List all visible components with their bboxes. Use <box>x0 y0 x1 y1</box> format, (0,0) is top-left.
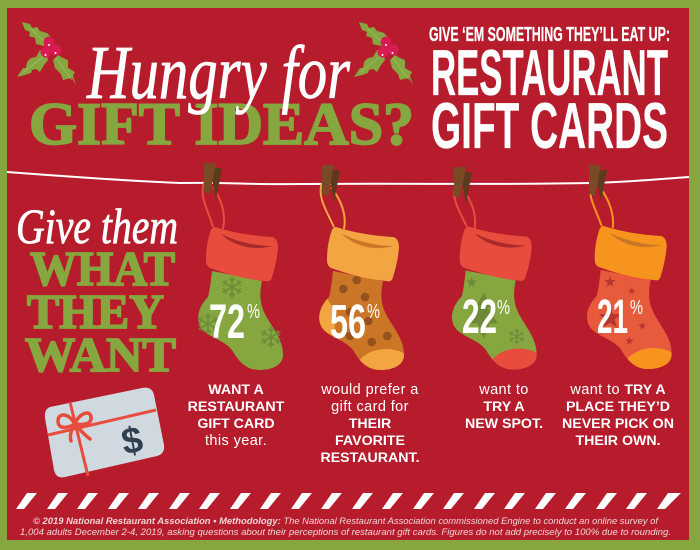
caption: 56%: gift card for <box>331 399 409 415</box>
caption: 72%: GIFT CARD <box>197 416 275 432</box>
caption: 56%: would prefer a <box>320 382 419 398</box>
heading: WANT: WANT <box>25 327 176 382</box>
caption: 56%: THEIR <box>349 416 391 432</box>
stocking: 22% <box>452 189 537 370</box>
caption: 21%: THEIR OWN. <box>575 433 661 449</box>
caption: 72% <box>188 382 285 449</box>
striped divider <box>16 493 681 509</box>
caption: 21%: PLACE THEY’D <box>566 399 670 415</box>
icon: holly left <box>17 22 76 85</box>
caption: 72%: RESTAURANT <box>188 399 285 415</box>
stat: 21%: 21 <box>597 291 628 344</box>
caption: 72%: WANT A <box>208 382 264 398</box>
caption: 56%: RESTAURANT. <box>320 450 420 466</box>
footer methodology: © 2019 National Restaurant Association • Methodology: The National Restaurant Association commissioned Engine to conduct an online survey of <box>33 516 659 527</box>
caption: 21% <box>562 382 674 449</box>
stat: 72%: 72 <box>209 296 245 349</box>
caption: 56%: FAVORITE <box>335 433 405 449</box>
footer methodology <box>20 516 671 538</box>
caption: 56% <box>320 382 420 466</box>
clothespins <box>204 163 607 204</box>
stocking: 72% <box>198 183 283 370</box>
stocking: 21% <box>586 190 672 369</box>
heading: WHAT: WHAT <box>30 241 175 296</box>
caption: 22%: NEW SPOT. <box>465 416 543 432</box>
stat: 22%: 22 <box>462 291 497 344</box>
clothesline <box>7 172 689 184</box>
caption: 21%: want to TRY A <box>569 382 666 398</box>
icon: holly right <box>354 22 413 85</box>
icon: gift card: $ <box>118 418 147 463</box>
title: Hungry for: Hungry for <box>86 31 350 115</box>
stat: 56%: % <box>367 301 380 323</box>
caption: 22% <box>465 382 543 432</box>
caption: 21%: NEVER PICK ON <box>562 416 674 432</box>
title: GIFT IDEAS?: GIFT IDEAS? <box>29 91 414 157</box>
icon: gift card <box>45 388 164 477</box>
heading: THEY: THEY <box>27 284 164 339</box>
caption: 22%: TRY A <box>483 399 525 415</box>
caption: 22%: want to <box>478 382 529 398</box>
stat: 21%: % <box>630 297 643 319</box>
heading: Give them: Give them <box>16 198 178 254</box>
stocking: 56% <box>319 182 404 370</box>
footer methodology: 1,004 adults December 2-4, 2019, asking questions about their perceptions of restaurant gift cards. Figures do not add precisely to 100% due to rounding. <box>20 527 671 538</box>
stat: 56%: 56 <box>330 296 366 349</box>
stat: 72%: % <box>247 301 260 323</box>
stat: 22%: % <box>497 297 510 319</box>
caption: 72%: this year. <box>205 433 267 449</box>
